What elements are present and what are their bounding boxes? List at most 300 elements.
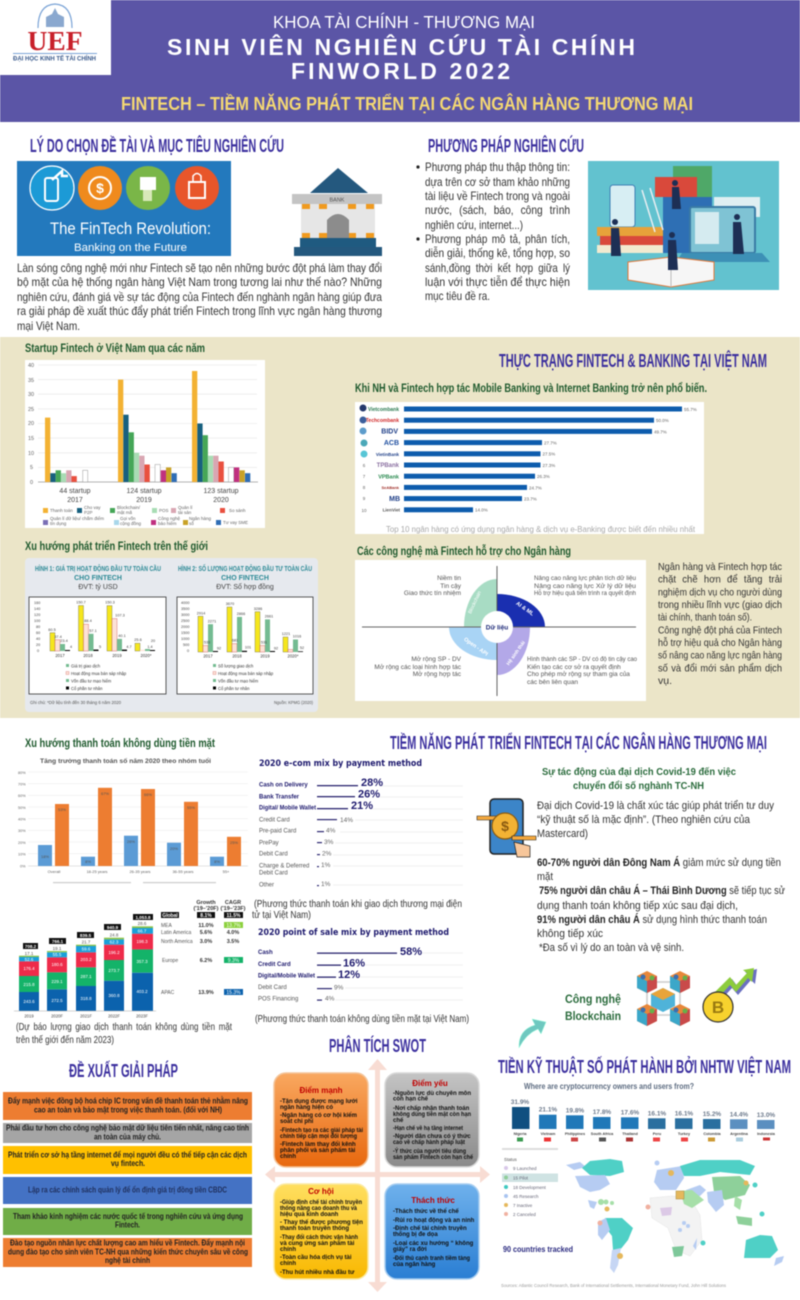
bar chart: digital payment growth by age: 8% <box>214 859 220 864</box>
bar chart: number of deals: 2866 <box>237 612 245 616</box>
text: fintech cooperation paragraph: tài chính, thanh toán số). <box>658 612 752 624</box>
chart title: point of sale mix: 2020 point of sale mix by payment method <box>258 928 449 938</box>
bar chart: number of deals: 3500 <box>181 607 189 611</box>
text: rationale paragraph: bộ mặt của hệ thống ngân hàng Việt Nam trong tương lai như thế nào? Những <box>17 275 382 289</box>
stacked bar chart: cashless transaction forecast <box>14 914 156 1018</box>
bar chart: top 10 banks: 26.3% <box>537 474 550 479</box>
bar chart: startups by year: 10 <box>28 451 34 457</box>
stacked bar chart: cashless transaction forecast: 229.1 <box>51 979 63 984</box>
bar chart: startups by year: 35 <box>28 378 34 384</box>
text: fintech cooperation paragraph: hỗ trợ hiệu quả cho Ngân hàng <box>658 636 782 649</box>
icon: bitcoin growth <box>703 968 757 1022</box>
subtitle: FINTECH – TIỀM NĂNG PHÁT TRIỂN TẠI CÁC NGÂN HÀNG THƯƠNG MẠI <box>121 93 693 114</box>
bar chart: crypto users by country: Peru <box>653 1132 662 1136</box>
bar chart: investment value: 1.4 <box>147 645 153 649</box>
SWOT: opportunities: -Toàn cầu hóa dịch vụ tài <box>280 1255 352 1261</box>
bar chart: digital payment growth by age: 66% <box>144 792 152 797</box>
bar chart: crypto users by country: 21.1% <box>539 1107 557 1114</box>
bar chart: investment value: Cổ phần tư nhân <box>71 686 103 691</box>
bar chart: digital payment growth by age: 50% <box>18 806 26 810</box>
bar chart: top 10 banks: 55.7% <box>684 407 697 412</box>
icon: bitcoin growth: B <box>712 998 724 1017</box>
bar chart: crypto users by country: Vietnam <box>541 1132 556 1136</box>
legend: CBDC status: 15 Pilot <box>513 1176 529 1180</box>
bar chart: investment value: 80 <box>36 625 40 629</box>
bar chart: number of deals: 500 <box>183 643 189 647</box>
bar chart: investment value: 160 <box>34 601 40 605</box>
event name: FINWORLD 2022 <box>291 58 510 84</box>
source line: Sources: Atlantic Council Research, Bank of International Settlements, International Monetary Fund, John Hill Solutions <box>501 1283 727 1288</box>
bar chart: startups by year: bảo hiểm <box>158 520 177 526</box>
text: method bullets: tài liệu về Fintech trong và ngoài <box>425 189 570 203</box>
bar chart: digital payment growth by age: 0% <box>20 864 26 868</box>
bar chart: crypto users by country: Argentina <box>730 1132 749 1136</box>
text: method bullets: sánh,đồng thời kết hợp giữa lý <box>425 261 570 275</box>
SWOT: weaknesses: -Ý thức của người tiêu dùng <box>393 1148 466 1155</box>
bar chart: startups by year: Công nghệ <box>158 516 181 521</box>
bar chart: top 10 banks: VPBank <box>378 474 400 480</box>
table: growth by region: CAGR <box>225 900 241 906</box>
text: fintech cooperation paragraph: trong nhiều lĩnh vực (giao dịch <box>658 599 782 611</box>
table: growth by region <box>161 900 246 996</box>
diagram: technology quadrants: các bên liên quan <box>527 679 578 686</box>
text: method bullets: Phương pháp thu thập thông tin: <box>425 160 570 174</box>
stacked bar chart: cashless transaction forecast: 2021F <box>80 1014 92 1018</box>
bar chart: point of sale mix: 58% <box>400 946 422 958</box>
stacked bar chart: cashless transaction forecast: 203.2 <box>80 957 92 962</box>
stacked bar chart: cashless transaction forecast: 66.7 <box>138 928 147 934</box>
stacked bar chart: cashless transaction forecast: 196.2 <box>108 950 120 955</box>
bar chart: startups by year <box>25 360 265 528</box>
SWOT: opportunities: chính <box>280 1261 296 1267</box>
text: covid statistics: 91% người dân châu Á sử dụng hình thức thanh toán <box>537 913 767 926</box>
label: blockchain technology: Công nghệ <box>565 992 621 1006</box>
SWOT: threats: thống bị đe dọa <box>393 1231 438 1238</box>
bar chart: digital payment growth by age: 18-25 years <box>86 869 108 874</box>
legend: CBDC status: 18 Development <box>513 1185 547 1190</box>
chart title: e-commerce mix: 2020 e-com mix by payment method <box>259 759 422 769</box>
panel: SWOT analysis <box>265 1035 490 1292</box>
bar chart: crypto users by country: 31.9% <box>511 1099 529 1106</box>
logo: UEF: UEF <box>28 26 82 56</box>
bar chart: top 10 banks: 23.7% <box>524 496 537 502</box>
arrow: teal curved <box>519 1019 546 1048</box>
caption: forecast <box>16 1021 232 1046</box>
logo: UEF: ĐẠI HỌC KINH TẾ TÀI CHÍNH <box>13 52 96 62</box>
table: growth by region: 4.0% <box>227 930 239 936</box>
image: fintech revolution banner: The FinTech Revolution: <box>50 219 211 238</box>
SWOT: opportunities: -Giúp định chế tài chính truyền <box>280 1199 362 1206</box>
bar chart: number of deals: Cổ phần tư nhân <box>218 686 250 691</box>
bar chart: digital payment growth by age: 80% <box>18 771 26 775</box>
diagram: technology quadrants: Niềm tin <box>437 573 461 582</box>
text: covid statistics: 60-70% người dân Đông Nam Á giảm mức sử dụng tiền <box>537 856 781 869</box>
bar chart: crypto users by country: Colombia <box>703 1132 722 1136</box>
bar chart: point of sale mix: 4% <box>325 996 335 1002</box>
panel: central bank digital currency <box>498 1056 791 1288</box>
diagram: technology quadrants: Hệ sinh thái <box>506 640 527 667</box>
bar chart: digital payment growth by age: 36-55 years <box>172 869 194 874</box>
panel: beige section background <box>0 337 800 718</box>
bar chart: startups by year: 44 startup <box>59 488 91 495</box>
bar chart: number of deals: 92 <box>217 646 221 650</box>
SWOT: opportunities: hiệu quả kinh doanh <box>280 1212 339 1218</box>
bar chart: e-commerce payment mix: PrePay <box>259 840 279 846</box>
bar chart: digital payment growth by age: 70% <box>18 782 26 786</box>
table: growth by region: 3.0% <box>200 939 212 945</box>
bar chart: digital payment growth by age: 67% <box>101 791 109 796</box>
table: growth by region: 15.3% <box>226 990 241 996</box>
bar chart: number of deals: 531 <box>261 640 267 644</box>
text: fintech cooperation paragraph: chặt chẽ hơn để tăng trải <box>658 574 782 586</box>
SWOT: weaknesses <box>385 1073 479 1167</box>
bar chart: startups by year: 20 <box>28 421 34 427</box>
table: growth by region: 13.9% <box>198 990 214 996</box>
stacked bar chart: cashless transaction forecast: 55.5 <box>53 952 62 957</box>
bar chart: point of sale mix: Cash <box>258 950 273 956</box>
chart title: figure 1: HÌNH 1: GIÁ TRỊ HOẠT ĐỘNG ĐẦU TƯ TOÀN CẦU <box>35 563 161 573</box>
table: growth by region: MEA <box>161 923 172 929</box>
bar chart: crypto users by country <box>511 1099 776 1142</box>
bar chart: number of deals: 2661 <box>265 614 273 618</box>
icon: mobile payment <box>477 799 536 857</box>
text: method bullets <box>416 160 570 303</box>
bar chart: startups by year: 30 <box>28 392 34 398</box>
bar chart: point of sale mix <box>258 946 463 1002</box>
bar chart: e-commerce payment mix: 21% <box>351 800 373 812</box>
bar chart: investment value: 40 <box>36 637 40 641</box>
stacked bar chart: cashless transaction forecast: 2020F <box>51 1014 63 1018</box>
bar chart: point of sale mix: 9% <box>334 984 344 992</box>
bar chart: investment value <box>29 597 166 694</box>
SWOT: opportunities <box>274 1184 368 1279</box>
solution 6: Đào tạo nguồn nhân lực chất lượng cao am hiểu về Fintech. Đẩy mạnh nội <box>10 1238 245 1248</box>
table: growth by region: Europe <box>162 958 178 964</box>
bar chart: startups by year: 2019 <box>136 497 152 504</box>
label: blockchain technology <box>565 992 621 1023</box>
stacked bar chart: cashless transaction forecast: 272.5 <box>51 998 63 1003</box>
heading: global trends: Xu hướng phát triển Fintech trên thế giới <box>25 539 208 553</box>
bar chart: point of sale mix: Digital/Mobile Wallet <box>258 974 315 980</box>
bar chart: number of deals: 1016 <box>293 634 301 638</box>
text: covid statistics: dụng thanh toán không tiếp xúc sau đại dịch, <box>537 900 738 912</box>
stacked bar chart: cashless transaction forecast: 243.6 <box>23 999 35 1004</box>
table: growth by region: 8.1% <box>200 913 212 919</box>
bar chart: e-commerce payment mix: 14% <box>340 817 353 824</box>
bar chart: startups by year: mật mã <box>117 510 133 515</box>
subheading: mobile banking: Khi NH và Fintech hợp tác Mobile Banking và Internet Banking trở nên phổ biến. <box>355 381 707 395</box>
bar chart: investment value: Hoạt động mua bán sáp nhập <box>71 671 127 676</box>
label: countries tracked: 90 countries tracked <box>503 1245 573 1254</box>
heading: cashless trend: Xu hướng thanh toán không dùng tiền mặt <box>25 736 215 750</box>
table: growth by region: ('19–'23F) <box>221 906 246 912</box>
bar chart: number of deals: 2000 <box>181 625 189 629</box>
stacked bar chart: cashless transaction forecast: 19.1 <box>53 946 62 951</box>
SWOT: strengths <box>274 1073 368 1167</box>
bar chart: digital payment growth by age: 8% <box>85 859 91 864</box>
bar chart: number of deals: 2018 <box>232 654 242 658</box>
legend: CBDC status: 2 Canceled <box>513 1212 536 1217</box>
SWOT: strengths: chính tiếp cận mọi đối tượng <box>280 1133 357 1140</box>
image: fintech revolution banner <box>17 161 231 256</box>
caption: point of sale mix: (Phương thức thanh toán không dùng tiền mặt tại Việt Nam) <box>255 1013 469 1025</box>
text: method bullets: dựa trên cơ sở tham khảo những <box>425 175 570 189</box>
table: growth by region: ('19–'20F) <box>194 906 219 912</box>
bar chart: e-commerce payment mix: 4% <box>326 828 336 834</box>
bar chart: startups by year: 40 <box>28 363 34 369</box>
SWOT: threats: giấy” ra đời <box>393 1246 427 1253</box>
text: fintech cooperation paragraph: vụ. <box>658 675 672 687</box>
stacked bar chart: cashless transaction forecast: 1,053.8 <box>135 915 151 920</box>
legend: CBDC status: Status <box>504 1157 518 1162</box>
table: growth by region: 9.3% <box>228 958 240 964</box>
bar chart: top 10 banks: Top 10 ngân hàng có ứng dụng ngân hàng & dịch vụ e-Banking được biết đến nhiều nhất <box>386 525 696 534</box>
bar chart: top 10 banks: Techcombank <box>366 418 399 424</box>
bar chart: digital payment growth by age: 55+ <box>223 869 230 874</box>
text: method bullets: luận với thực tiễn để thực hiện <box>425 274 570 289</box>
bar chart: investment value: 2017 <box>55 653 65 658</box>
bar chart: crypto users by country: 19.8% <box>566 1107 584 1114</box>
stacked bar chart: cashless transaction forecast: 2022F <box>108 1014 120 1018</box>
bar chart: e-commerce payment mix: Bank Transfer <box>259 794 300 800</box>
table: growth by region: 5.6% <box>200 930 212 936</box>
bar chart: digital payment growth by age: 20% <box>170 846 178 851</box>
stacked bar chart: cashless transaction forecast: 287.1 <box>80 974 92 979</box>
heading: reasons: LÝ DO CHỌN ĐỀ TÀI VÀ MỤC TIÊU NGHIÊN CỨU <box>30 135 284 156</box>
footnote: Ghi chú: *Dữ liệu tính đến 30 tháng 6 năm 2020 <box>30 700 121 705</box>
chart title: figure 2: CHO FINTECH <box>221 575 269 582</box>
text: method bullets: diễn giải, thống kê, tổng hợp, so <box>425 245 570 260</box>
diagram: technology quadrants: Hỗ trợ hiệu quả tiến trình ra quyết định <box>534 588 636 597</box>
bar chart: digital payment growth by age: 55% <box>187 805 195 810</box>
SWOT: opportunities: thống nâng cao doanh thu và <box>280 1205 358 1212</box>
stacked bar chart: cashless transaction forecast: 62.3 <box>110 940 119 944</box>
SWOT: opportunities: Cơ hội <box>308 1187 334 1196</box>
bar chart: crypto users by country: 16.1% <box>675 1110 693 1117</box>
diagram: technology quadrants: Tin cậy <box>440 583 462 590</box>
table: growth by region: 6.2% <box>200 958 212 964</box>
bar chart: top 10 banks: 7 <box>363 474 366 479</box>
image: fintech revolution banner: Banking on the Future <box>74 242 187 254</box>
bar chart: startups by year: Tư vay SME <box>223 520 248 525</box>
icon: bank building: BANK <box>330 198 345 204</box>
bar chart: digital payment growth by age: 40% <box>18 818 26 822</box>
stacked bar chart: cashless transaction forecast: 215.8 <box>23 982 35 987</box>
icon: blockchain cubes <box>637 971 690 1026</box>
bar chart: investment value: 57.1 <box>89 629 97 633</box>
bar chart: investment value: 25.6 <box>134 638 142 642</box>
bar chart: number of deals: Hoạt động mua bán sáp nhập <box>218 671 274 676</box>
bar chart: top 10 banks: 27.7% <box>544 440 557 446</box>
solution 6 <box>3 1238 252 1267</box>
bar chart: e-commerce payment mix: 26% <box>358 788 380 800</box>
panel: covid impact <box>477 766 786 954</box>
bar chart: startups by year: tín dụng <box>50 521 67 526</box>
heading: SWOT: PHÂN TÍCH SWOT <box>329 1035 426 1056</box>
bar chart: digital payment growth by age: 60% <box>18 794 26 798</box>
chart title: crypto owners: Where are cryptocurrency owners and users from? <box>524 1082 694 1091</box>
SWOT: opportunities: -Thay đổi cách thức vận hành <box>280 1234 358 1241</box>
bar chart: investment value: 60 <box>36 631 40 635</box>
bar chart: digital payment growth by age: 30% <box>18 829 26 833</box>
heading: proposed solutions: ĐỀ XUẤT GIẢI PHÁP <box>69 1060 178 1081</box>
text: method bullets: nghiên cứu, internet...) <box>425 218 523 232</box>
faculty name: KHOA TÀI CHÍNH - THƯƠNG MẠI <box>273 12 535 32</box>
bar chart: e-commerce payment mix: Debit Card <box>259 852 288 858</box>
icon: mobile payment: $ <box>501 818 509 834</box>
stacked bar chart: cashless transaction forecast: 940.9 <box>107 925 119 930</box>
text: rationale paragraph: ra giải pháp đề xuất thúc đẩy phát triển Fintech trong lĩnh vực ngân hàng thương <box>17 304 382 318</box>
SWOT: weaknesses: chế <box>393 1117 404 1124</box>
text: rationale paragraph: Làn sóng công nghệ mới như Fintech sẽ tạo nên những bước đột phá làm thay đổi <box>17 261 382 275</box>
bar chart: number of deals: 2500 <box>181 619 189 623</box>
table: growth by region: 3.5% <box>227 939 239 945</box>
text: rationale paragraph: nghiên cứu, đánh giá về sự tác động của Fintech đến nghành ngân hàng giúp đưa <box>17 290 382 304</box>
panel: fintech and banking status in Vietnam <box>355 350 782 701</box>
table: growth by region: Latin America <box>161 930 192 936</box>
solution 6: dung đào tạo cho sinh viên TC-NH qua những kiến thức chuyên sâu về công <box>8 1248 248 1256</box>
bar chart: e-commerce payment mix: Other <box>259 882 274 888</box>
bar chart: investment value: 20 <box>151 639 155 643</box>
text: fintech cooperation paragraph: Ngân hàng và Fintech hợp tác <box>658 561 782 573</box>
bar chart: top 10 banks: 8 <box>363 485 366 490</box>
bar chart: e-commerce payment mix: Digital/ Mobile Wallet <box>259 806 316 812</box>
bar chart: e-commerce payment mix: 1% <box>321 862 331 869</box>
caption: e-commerce mix: (Phương thức thanh toán khi giao dịch thương mại điện <box>254 898 462 910</box>
SWOT: threats: của ngân hàng <box>393 1262 436 1268</box>
SWOT: strengths: -Fintech làm thay đổi kênh <box>280 1141 356 1148</box>
panel: proposed solutions <box>3 1060 252 1267</box>
stacked bar chart: cashless transaction forecast: 403.2 <box>136 989 148 994</box>
diagram: technology quadrants: Mở rộng hợp tác <box>413 670 462 678</box>
bar chart: investment value: 2019 <box>112 653 122 658</box>
text: covid statistics: *Đa số vì lý do an toàn và vệ sinh. <box>539 942 684 954</box>
bar chart: number of deals: 681 <box>232 638 238 642</box>
bar chart: number of deals: 1221 <box>282 632 290 636</box>
bar chart: number of deals <box>177 597 313 694</box>
bar chart: crypto users by country: Nigeria <box>514 1132 527 1136</box>
solution 4: Lập ra các chính sách quản lý để ổn định giá trị đồng tiền CBDC <box>28 1184 227 1194</box>
bar chart: digital payment growth by age <box>18 757 248 883</box>
bar chart: digital payment growth by age: 18% <box>41 854 49 859</box>
bar chart: number of deals: 2020* <box>288 654 299 658</box>
stacked bar chart: cashless transaction forecast: 2019 <box>24 1014 34 1018</box>
text: covid statistics: Mastercard) <box>537 828 588 840</box>
panel: reasons and objectives <box>17 135 382 333</box>
legend: CBDC status: 45 Research <box>513 1194 539 1199</box>
panel: research methods <box>416 135 779 303</box>
bar chart: digital payment growth by age: Overall <box>48 869 60 874</box>
stacked bar chart: cashless transaction forecast: 360.8 <box>108 993 120 998</box>
icon: bank building <box>292 168 382 256</box>
text: fintech cooperation paragraph: số và đổi mới sản phẩm dịch <box>658 662 782 674</box>
bar chart: investment value: 88.4 <box>84 619 92 623</box>
SWOT: threats <box>385 1184 479 1279</box>
SWOT: opportunities: -Thu hút nhiều nhà đầu tư <box>280 1270 355 1276</box>
bar chart: top 10 banks: 24.7% <box>529 486 542 490</box>
bar chart: point of sale mix: 12% <box>338 969 360 981</box>
bar chart: digital payment growth by age: 10% <box>18 852 26 856</box>
bar chart: startups by year: tài sản <box>178 510 192 515</box>
stacked bar chart: cashless transaction forecast: 21.7 <box>82 940 91 944</box>
bar chart: investment value: 20 <box>36 643 40 647</box>
text: covid statistics <box>537 800 786 954</box>
SWOT: strengths: chính <box>280 1154 296 1160</box>
solution 5: Fintech. <box>115 1220 140 1230</box>
bar chart: startups by year: 2017 <box>67 497 83 504</box>
stacked bar chart: cashless transaction forecast: 176.4 <box>23 966 35 971</box>
bar chart: investment value: 100 <box>34 619 40 623</box>
bar chart: startups by year: P2P <box>84 510 93 515</box>
panel: global fintech trends <box>25 539 318 712</box>
bar chart: point of sale mix: Debit Card <box>258 985 287 991</box>
SWOT: weaknesses: -Nguồn lực dù chuyên môn <box>393 1091 471 1097</box>
SWOT: opportunities: thanh toán truyền thống <box>280 1225 349 1232</box>
bar chart: investment value: 2018 <box>83 653 93 658</box>
table: growth by region: 11.0% <box>198 923 214 929</box>
bar chart: e-commerce payment mix: 28% <box>361 777 383 789</box>
text: fintech cooperation paragraph <box>658 561 782 687</box>
stacked bar chart: cashless transaction forecast: 273.7 <box>108 968 120 973</box>
bar chart: top 10 banks: 9 <box>363 496 366 501</box>
heading: startup fintech: Startup Fintech ở Việt Nam qua các năm <box>25 341 205 355</box>
diagram: technology quadrants: Mở rộng các loại hình hợp tác <box>374 663 462 671</box>
bar chart: top 10 banks: SeABank <box>381 485 400 490</box>
bar chart: number of deals: 2271 <box>208 620 216 624</box>
bar chart: point of sale mix: 16% <box>343 958 365 970</box>
bar chart: digital payment growth by age: 20% <box>18 841 26 845</box>
diagram: technology quadrants: Kiến tạo các cơ sở ra quyết định <box>527 662 621 671</box>
SWOT: threats: -Đối thủ cạnh tranh tiềm tàng <box>393 1255 470 1262</box>
bar chart: investment value: 37.4 <box>54 635 62 639</box>
diagram: technology quadrants <box>355 560 646 701</box>
SWOT: opportunities: - Thay thế được phương tiện <box>280 1219 363 1226</box>
bar chart: startups by year: So sánh <box>229 508 246 513</box>
bar chart: investment value: 5 <box>99 645 101 649</box>
bar chart: digital payment growth by age: 26-35 years <box>129 869 151 874</box>
stacked bar chart: cashless transaction forecast: 180.6 <box>51 962 63 967</box>
SWOT: strengths: soát chi phí <box>280 1119 314 1125</box>
solution 1: Đẩy mạnh việc đồng bộ hoá chip IC trong vấn đề thanh toán thẻ nhằm nâng <box>8 1094 248 1106</box>
bar chart: crypto users by country: Philippines <box>565 1132 585 1136</box>
subheading: covid impact: Sự tác động của đại dịch Covid-19 đến việc <box>542 766 736 778</box>
SWOT: threats: Thách thức <box>411 1196 455 1205</box>
bar chart: top 10 banks: 49.7% <box>654 430 667 434</box>
caption: e-commerce mix <box>252 898 462 921</box>
bar chart: point of sale mix: POS Financing <box>258 996 298 1002</box>
bar chart: startups by year: 15 <box>28 436 34 442</box>
subheading: covid impact <box>542 766 736 792</box>
SWOT: threats: -Định chế tài chính truyền <box>393 1225 467 1232</box>
panel: cashless payment trends <box>14 736 248 1046</box>
logo: UEF <box>0 0 111 75</box>
diagram: technology quadrants: Nâng cao năng lực Xử lý dữ liệu <box>534 582 636 590</box>
bar chart: top 10 banks: 27.5% <box>542 452 555 457</box>
image: research illustration with books <box>588 161 779 290</box>
arrows: SWOT cross <box>265 1059 490 1292</box>
diagram: technology quadrants: Open - API <box>462 637 489 658</box>
bar chart: crypto users by country: 17.8% <box>593 1109 611 1116</box>
bar chart: number of deals: Vốn đầu tư mạo hiểm <box>218 678 259 684</box>
bar chart: investment value: 150.7 <box>76 600 86 604</box>
table: growth by region: Global <box>162 913 178 919</box>
bar chart: top 10 banks: ACB <box>384 440 399 447</box>
SWOT: strengths: -Ngân hàng có cơ hội kiểm <box>280 1112 357 1119</box>
diagram: technology quadrants: AI & ML <box>514 601 535 618</box>
bar chart: number of deals: 92 <box>274 646 278 650</box>
bar chart: top 10 banks: Vietcombank <box>368 407 399 413</box>
SWOT: opportunities: và cung ứng sản phẩm tài <box>280 1240 355 1247</box>
